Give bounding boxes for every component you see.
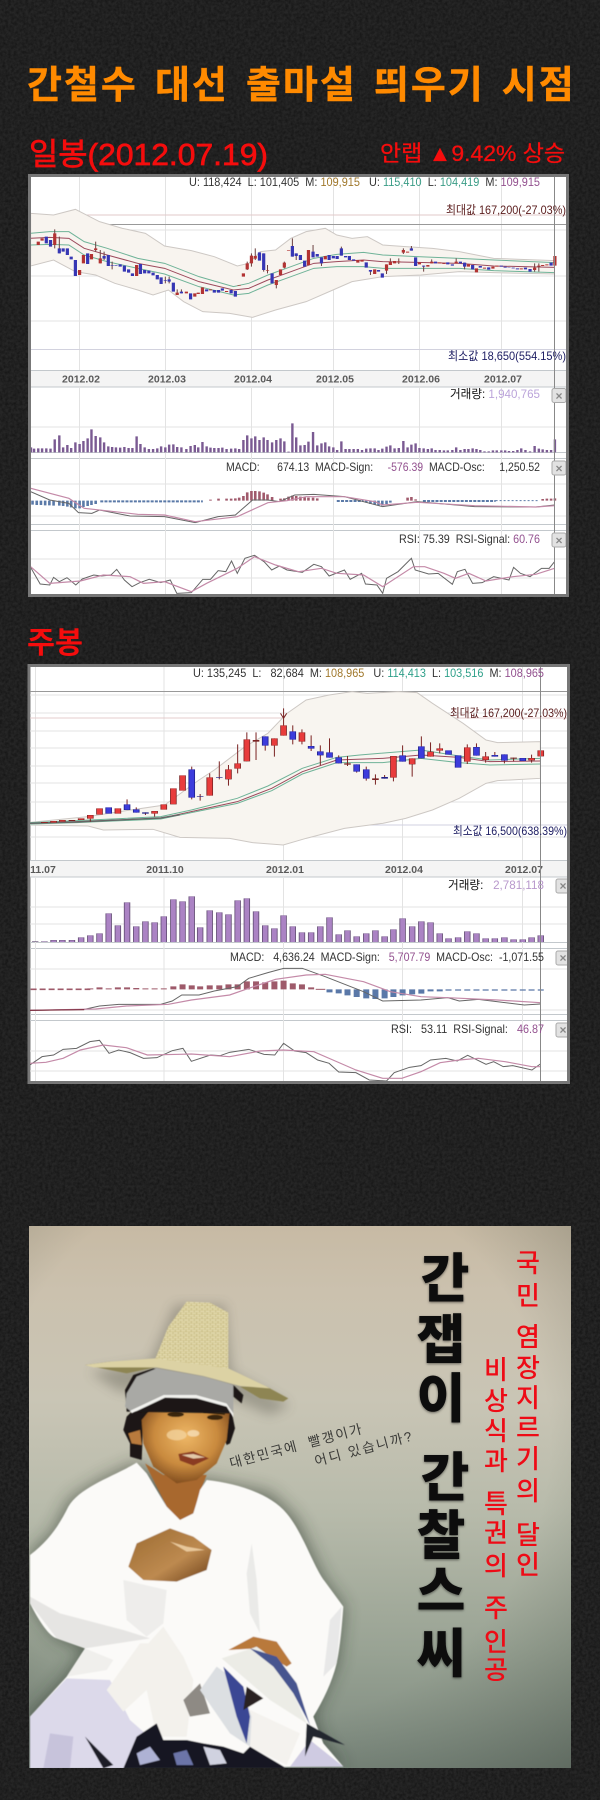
tagline column right bbox=[517, 1251, 540, 1576]
heading: weekly chart: 주봉 bbox=[27, 627, 83, 660]
chart readouts: 최소값 18,650(554.15%) bbox=[448, 349, 566, 363]
hat brim bbox=[86, 1358, 270, 1389]
title: 간철수 대선 출마설 띄우기 시점 bbox=[27, 65, 576, 107]
volume bars bbox=[31, 423, 555, 452]
chart readouts: 최대값 167,200(-27.03%) bbox=[446, 203, 566, 217]
fish pile bbox=[85, 1737, 113, 1768]
tagline column right: 염 bbox=[516, 1317, 540, 1354]
price x-axis band bbox=[31, 370, 566, 530]
chart readouts: 최소값 16,500(638.39%) bbox=[453, 824, 567, 838]
ties bbox=[107, 1627, 193, 1737]
head bbox=[128, 1430, 142, 1445]
weekly candlesticks with bollinger bands bbox=[30, 692, 541, 845]
chart readouts: 거래량: 2,781,118 bbox=[448, 878, 544, 892]
price x-axis band: 2012.03 bbox=[148, 374, 186, 386]
chart readouts: MACD: 674.13 MACD-Sign: -576.39 MACD-Osc: 1,250.52 bbox=[226, 460, 540, 474]
tagline column left: 공 bbox=[484, 1650, 508, 1687]
title: calligraphic vertical: 이 bbox=[417, 1357, 465, 1433]
time axis band: 2012.01 bbox=[266, 864, 304, 876]
callout: Ahnlab rise: 안랩 ▲9.42% 상승 bbox=[380, 141, 565, 166]
chart readouts bbox=[193, 666, 567, 1036]
panel: satirical movie poster bbox=[29, 1226, 571, 1768]
MACD histogram and lines bbox=[31, 488, 555, 523]
pane close buttons: × bbox=[559, 1023, 567, 1037]
panel: daily chart bbox=[30, 175, 568, 596]
tagline column right: 인 bbox=[516, 1545, 540, 1582]
hair bbox=[123, 1403, 235, 1460]
price x-axis band: 2012.07 bbox=[484, 374, 522, 386]
price candlesticks with bollinger bands bbox=[31, 209, 555, 317]
chart readouts: U: 135,245 L: 82,684 M: 108,965 U: 114,413 L: 103,516 M: 108,965 bbox=[193, 666, 544, 680]
tagline column right: 달 bbox=[516, 1515, 540, 1552]
facial features bbox=[203, 1412, 226, 1416]
hair under hat bbox=[125, 1368, 243, 1413]
tagline column left: 비 bbox=[484, 1350, 508, 1387]
tagline column left: 인 bbox=[484, 1622, 508, 1659]
pane close buttons bbox=[552, 388, 566, 548]
trousers left bbox=[30, 1678, 157, 1768]
tagline column left: 상 bbox=[484, 1381, 508, 1418]
hat underside bbox=[86, 1364, 154, 1374]
tagline column right: 의 bbox=[516, 1471, 540, 1508]
tagline column right: 기 bbox=[516, 1439, 540, 1476]
tagline column left: 주 bbox=[484, 1588, 508, 1625]
straw hat and headband bbox=[85, 1302, 288, 1417]
time axis band bbox=[30, 860, 567, 1020]
heading: daily chart: 일봉(2012.07.19) bbox=[29, 137, 268, 172]
figure in white hanbok bbox=[30, 1402, 345, 1768]
time axis band: 2012.04 bbox=[385, 864, 423, 876]
panel: weekly chart bbox=[29, 666, 570, 1082]
title: calligraphic vertical: 스 bbox=[417, 1550, 465, 1626]
hat shadow bbox=[90, 1305, 290, 1415]
trousers right and knee bbox=[250, 1710, 300, 1765]
lower hand bbox=[228, 1637, 292, 1667]
mackerel fish bbox=[200, 1667, 252, 1747]
tagline column left: 권 bbox=[484, 1513, 508, 1550]
title: calligraphic vertical: 간 bbox=[421, 1436, 469, 1512]
speech caption: 대한민국에 빨갱이가 bbox=[228, 1422, 363, 1471]
price x-axis band: 2012.05 bbox=[316, 374, 354, 386]
tagline column left: 의 bbox=[484, 1546, 508, 1583]
chart readouts: RSI: 75.39 RSI-Signal: 60.76 bbox=[399, 532, 540, 546]
speech caption: 어디 있습니까? bbox=[313, 1429, 413, 1469]
tagline column left bbox=[484, 1350, 508, 1687]
RSI lines bbox=[30, 1040, 540, 1081]
tagline column left: 식 bbox=[484, 1411, 508, 1448]
tagline column right: 르 bbox=[516, 1408, 540, 1445]
pane close buttons: × bbox=[555, 389, 563, 403]
tagline column left: 과 bbox=[484, 1441, 508, 1478]
neck bbox=[145, 1463, 207, 1521]
price x-axis band: 2012.06 bbox=[402, 374, 440, 386]
chart readouts: RSI: 53.11 RSI-Signal: 46.87 bbox=[391, 1022, 544, 1036]
hand holding grain bbox=[128, 1528, 212, 1582]
price x-axis band: 2012.02 bbox=[62, 374, 100, 386]
chart readouts: U: 118,424 L: 101,405 M: 109,915 U: 115,410 L: 104,419 M: 109,915 bbox=[189, 175, 540, 189]
figure shadow bbox=[30, 1463, 343, 1768]
volume bars bbox=[35, 896, 541, 942]
robe bbox=[30, 1463, 343, 1768]
title: calligraphic vertical: 씨 bbox=[417, 1612, 465, 1688]
hat crown bbox=[155, 1302, 228, 1370]
time axis band: 2012.07 bbox=[505, 864, 543, 876]
price x-axis band: 2012.04 bbox=[234, 374, 272, 386]
title: calligraphic vertical: 간 bbox=[421, 1237, 469, 1313]
tagline column right: 장 bbox=[516, 1348, 540, 1385]
MACD histogram and lines bbox=[30, 968, 541, 1010]
title: calligraphic vertical: 찰 bbox=[417, 1494, 465, 1570]
chart readouts bbox=[189, 175, 566, 546]
pane close buttons: × bbox=[559, 879, 567, 893]
title: calligraphic vertical: 잽 bbox=[417, 1298, 465, 1374]
title: calligraphic vertical bbox=[417, 1237, 469, 1688]
tagline column right: 국 bbox=[516, 1243, 540, 1280]
time axis band: 2011.10 bbox=[146, 864, 184, 876]
pane close buttons: × bbox=[559, 951, 567, 965]
tagline column left: 특 bbox=[484, 1484, 508, 1521]
chart readouts: MACD: 4,636.24 MACD-Sign: 5,707.79 MACD-Osc: -1,071.55 bbox=[230, 950, 544, 964]
headband bbox=[125, 1368, 233, 1413]
chart readouts: 최대값 167,200(-27.03%) bbox=[450, 706, 567, 720]
tagline column right: 민 bbox=[516, 1276, 540, 1313]
RSI lines bbox=[31, 555, 555, 593]
tagline column right: 지 bbox=[516, 1378, 540, 1415]
pane close buttons: × bbox=[555, 534, 563, 548]
chart readouts: 거래량: 1,940,765 bbox=[450, 387, 540, 401]
pane close buttons bbox=[556, 878, 567, 1038]
time axis band: 11.07 bbox=[30, 864, 56, 876]
pane close buttons: × bbox=[555, 462, 563, 476]
